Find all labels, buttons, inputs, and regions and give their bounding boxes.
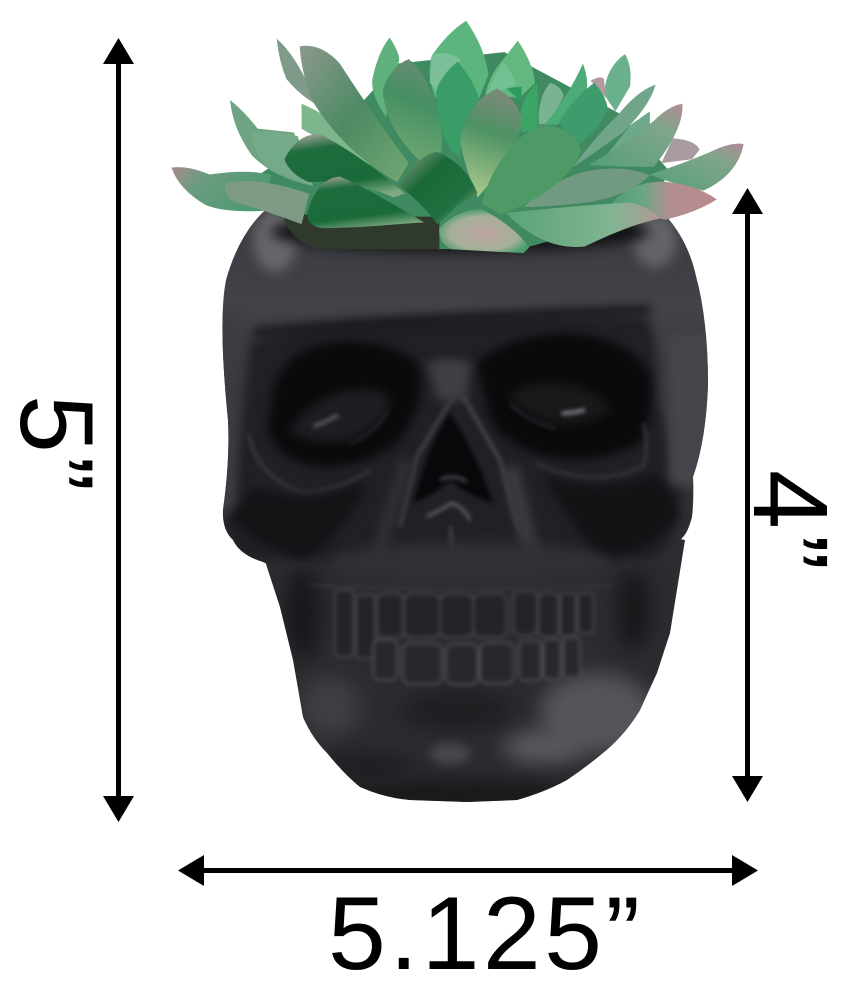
label: 5 in: 5” [0, 395, 114, 491]
arrow: width 5.125 in [178, 855, 758, 886]
rim highlights [253, 208, 297, 272]
side planes [668, 333, 712, 487]
face plane [226, 316, 683, 560]
left eye lid [288, 389, 390, 442]
cheek shadows [230, 485, 362, 560]
skull planter [210, 190, 715, 810]
arrow: height 4 in [732, 188, 763, 802]
right eye lid [513, 384, 607, 423]
gum line [314, 584, 316, 586]
nose ridges [400, 397, 453, 527]
nose cavity [413, 413, 493, 503]
arrow: height 5 in [103, 38, 134, 822]
snout blend [330, 542, 610, 582]
left eye socket [268, 342, 421, 467]
under-eye ridges [248, 433, 370, 493]
cranium [222, 211, 708, 564]
right eye socket [477, 333, 652, 460]
upper teeth [335, 590, 594, 658]
lower teeth [373, 637, 580, 685]
label: 4 in: 4” [731, 470, 849, 570]
succulent plant [171, 21, 744, 253]
plant base fill [260, 52, 669, 249]
jaw [266, 539, 685, 802]
label: 5.125 in: 5.125” [328, 876, 640, 990]
shadow under plant [270, 212, 650, 252]
nose bridge [427, 359, 472, 400]
